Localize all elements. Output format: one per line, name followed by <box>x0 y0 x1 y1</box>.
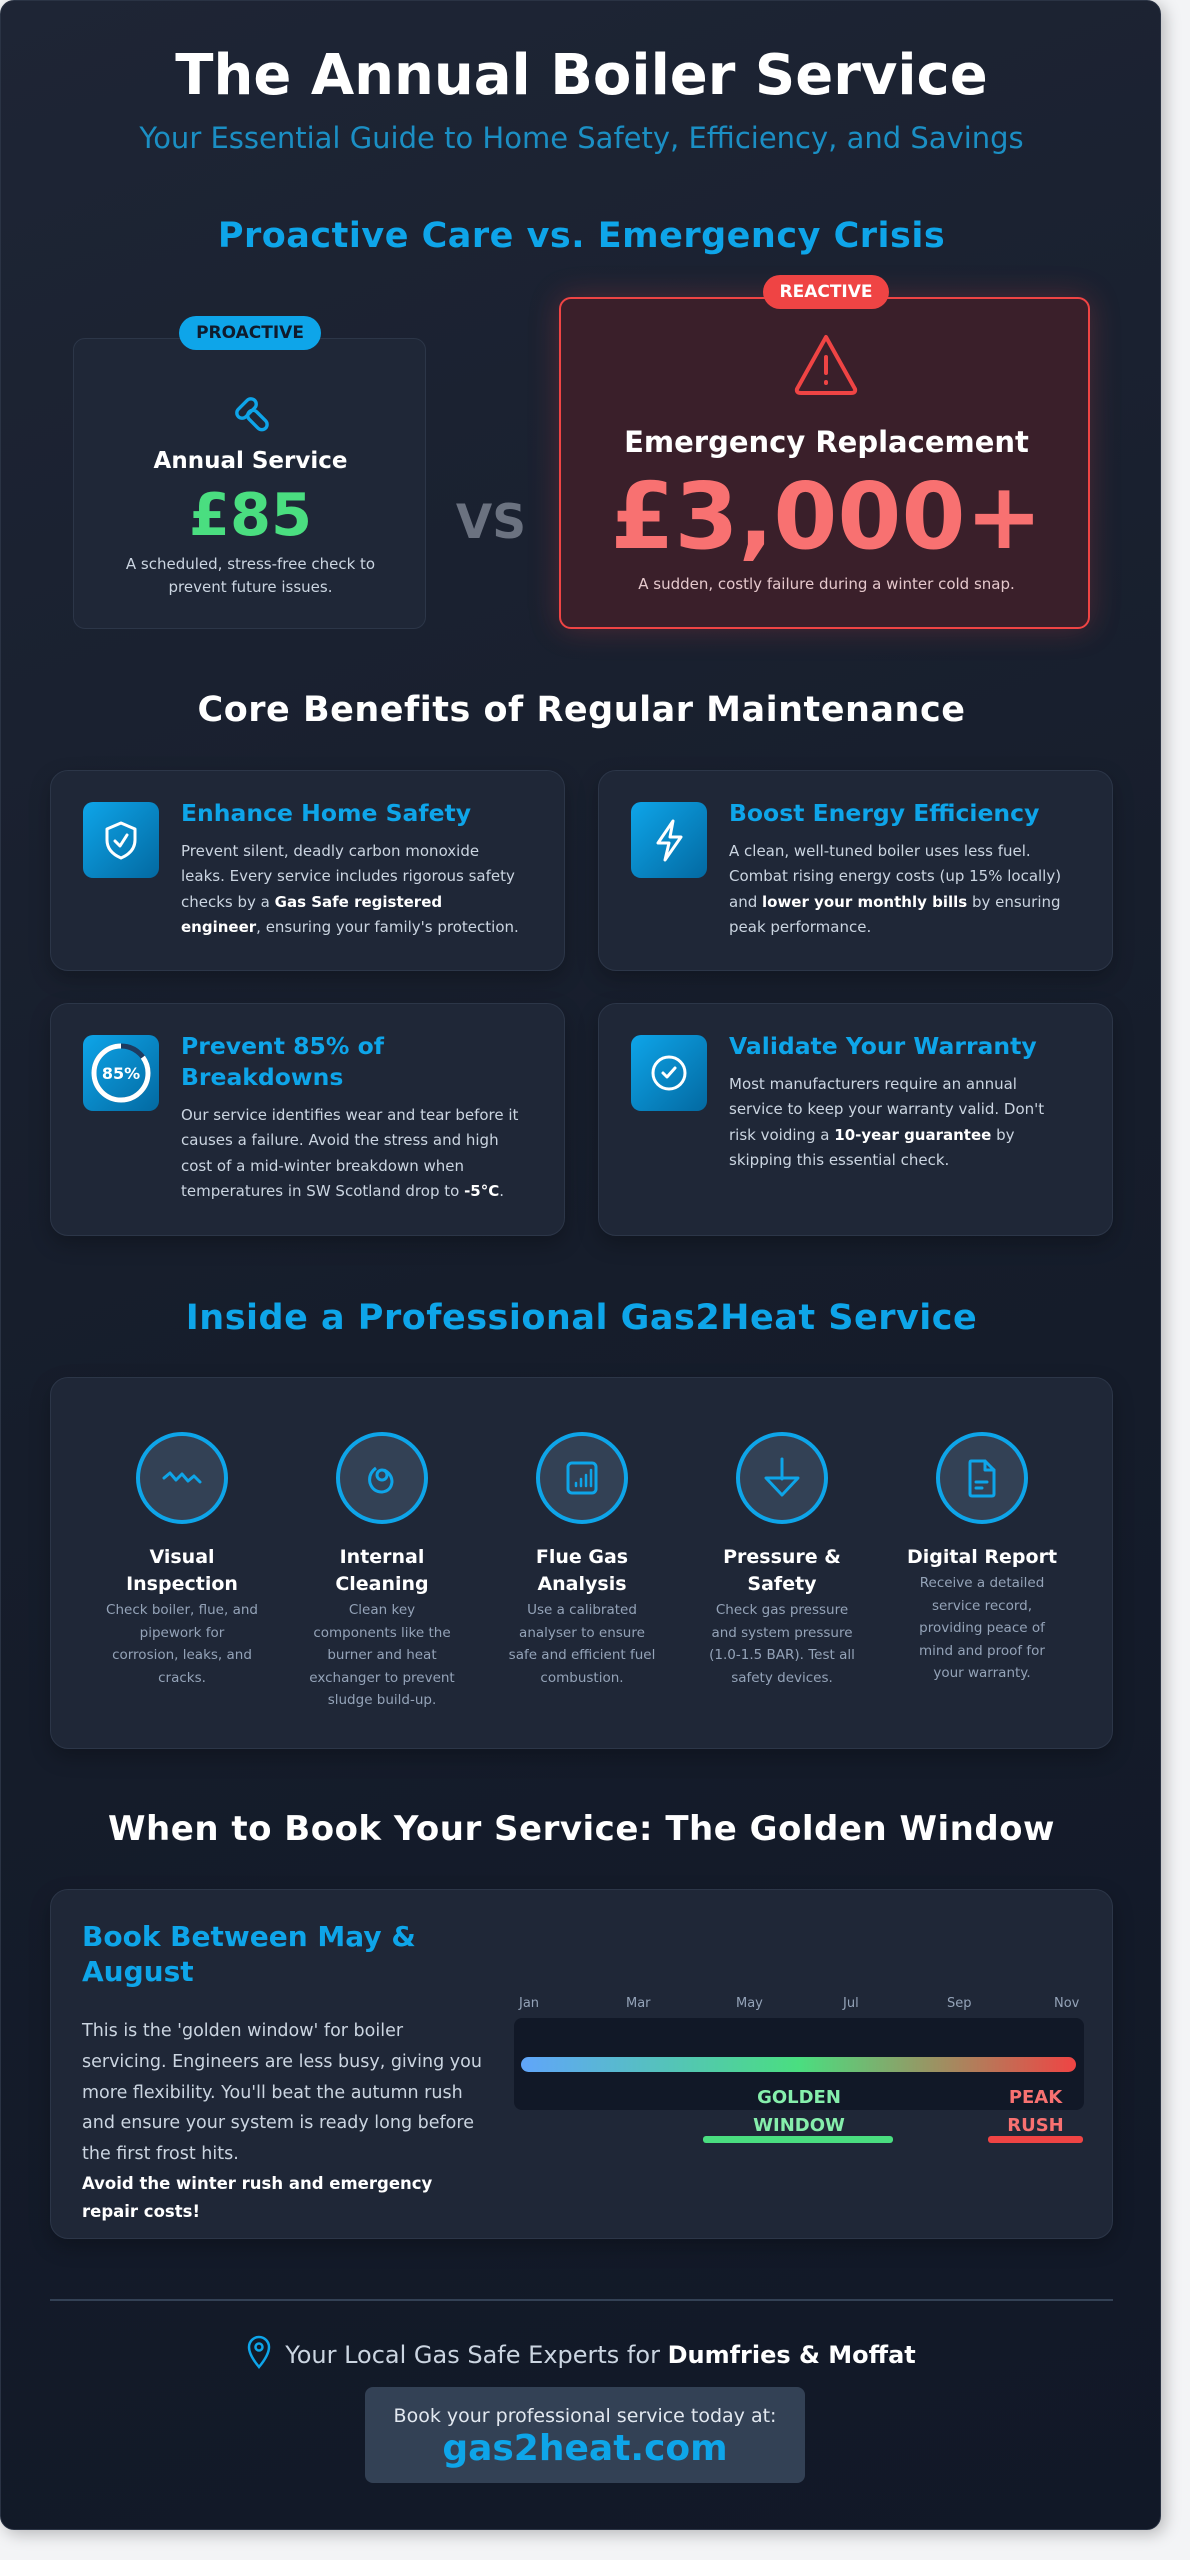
step: digital report <box>907 1432 1057 1681</box>
panel: service steps <box>50 1377 1113 1749</box>
footer: location line: Your Local Gas Safe Experts for Dumfries & Moffat <box>285 2341 916 2369</box>
panel: golden window <box>50 1889 1113 2239</box>
step: digital report: providing peace of <box>919 1620 1045 1636</box>
callout: Avoid the winter rush and emergency repair costs! <box>82 2174 432 2221</box>
month labels: Nov <box>1054 1996 1079 2011</box>
gradient bar <box>521 2057 1076 2072</box>
step: internal cleaning: sludge build-up. <box>328 1692 436 1708</box>
label: golden window: WINDOW <box>753 2115 845 2136</box>
title: Boost Energy Efficiency <box>729 799 1039 827</box>
step: internal cleaning: burner and heat <box>327 1647 437 1663</box>
step: flue gas analysis: Analysis <box>537 1573 627 1595</box>
text: A clean, well-tuned boiler uses less fuel. Combat rising energy costs (up 15% locally) and lower your monthly bills by ensuring peak performance. <box>729 842 1061 936</box>
badge: proactive: PROACTIVE <box>196 323 304 343</box>
step: pressure & safety: safety devices. <box>731 1670 833 1686</box>
panel: warranty <box>598 1003 1113 1236</box>
subtitle: Your Essential Guide to Home Safety, Efficiency, and Savings <box>139 121 1024 155</box>
step: internal cleaning <box>309 1432 455 1708</box>
label: golden window <box>753 2087 845 2136</box>
step: visual inspection <box>106 1432 258 1686</box>
label: peak rush: RUSH <box>1007 2115 1064 2136</box>
badge: reactive <box>763 275 889 309</box>
panel: proactive <box>73 338 426 629</box>
month labels: May <box>736 1996 763 2011</box>
heading: when to book: When to Book Your Service: The Golden Window <box>108 1809 1055 1849</box>
title: Enhance Home Safety <box>181 799 471 827</box>
heading: core benefits: Core Benefits of Regular Maintenance <box>198 690 965 730</box>
step: pressure & safety: (1.0-1.5 BAR). Test all <box>709 1647 855 1663</box>
text: proactive desc: A scheduled, stress-free check to prevent future issues. <box>126 555 375 596</box>
title: The Annual Boiler Service <box>175 43 988 108</box>
call to action <box>365 2387 805 2483</box>
price: £3,000+: £3,000+ <box>610 463 1043 570</box>
step: pressure & safety <box>709 1432 855 1686</box>
step: flue gas analysis: Flue Gas <box>536 1546 628 1568</box>
label: peak rush <box>1007 2087 1064 2136</box>
badge: reactive: REACTIVE <box>779 282 873 302</box>
step: visual inspection: cracks. <box>158 1670 206 1686</box>
step: visual inspection: Check boiler, flue, and <box>106 1602 258 1618</box>
step: flue gas analysis: Use a calibrated <box>527 1602 637 1618</box>
icon: check circle <box>631 1035 707 1111</box>
title: Book Between May & August <box>82 1920 416 1988</box>
month labels: Jan <box>519 1996 539 2011</box>
step: visual inspection: corrosion, leaks, and <box>112 1647 252 1663</box>
icon: warning <box>794 334 858 395</box>
heading: proactive vs reactive: Proactive Care vs. Emergency Crisis <box>218 216 945 256</box>
title: Prevent 85% of <box>181 1032 384 1060</box>
step: internal cleaning: Cleaning <box>335 1573 429 1595</box>
text: annual service: Annual Service <box>154 448 347 474</box>
step: pressure & safety: Safety <box>747 1573 817 1595</box>
month labels <box>518 1996 1079 2011</box>
step: internal cleaning: exchanger to prevent <box>309 1670 455 1686</box>
step: digital report: mind and proof for <box>919 1642 1045 1658</box>
step: internal cleaning: Internal <box>340 1546 424 1568</box>
chart: seasonal timeline <box>514 1996 1084 2143</box>
panel: efficiency <box>598 770 1113 971</box>
step: flue gas analysis: combustion. <box>540 1670 624 1686</box>
icon: 85% ring: 85% <box>102 1064 140 1083</box>
price: £85: £85 <box>189 480 312 549</box>
panel: breakdowns <box>50 1003 565 1236</box>
step: internal cleaning: components like the <box>313 1624 451 1640</box>
heading: inside service: Inside a Professional Gas2Heat Service <box>186 1298 977 1338</box>
text: emergency replacement: Emergency Replacement <box>624 425 1029 459</box>
step: pressure & safety: Check gas pressure <box>716 1602 848 1618</box>
title: Validate Your Warranty <box>729 1032 1037 1060</box>
step: flue gas analysis <box>509 1432 655 1686</box>
icon: shield <box>83 802 159 878</box>
step: visual inspection: Inspection <box>126 1573 238 1595</box>
icon: pin <box>248 2336 270 2369</box>
title: Breakdowns <box>181 1063 343 1091</box>
title <box>181 1032 384 1091</box>
step: visual inspection: Visual <box>149 1546 215 1568</box>
badge: proactive <box>179 316 321 350</box>
vs: VS <box>456 495 526 550</box>
step: pressure & safety: and system pressure <box>711 1624 853 1640</box>
step: internal cleaning: Clean key <box>349 1602 415 1618</box>
step: digital report: Receive a detailed <box>920 1575 1044 1591</box>
step: digital report: your warranty. <box>933 1665 1031 1681</box>
panel: reactive <box>559 297 1090 629</box>
text: reactive desc: A sudden, costly failure during a winter cold snap. <box>638 575 1015 593</box>
step: pressure & safety: Pressure & <box>723 1546 841 1568</box>
text: Our service identifies wear and tear before it causes a failure. Avoid the stress and high cost of a mid-winter breakdown when temperatures in SW Scotland drop to -5°C. <box>181 1106 518 1200</box>
icon: lightning <box>631 802 707 878</box>
icon: wrench <box>235 397 269 432</box>
month labels: Mar <box>626 1996 651 2011</box>
label: peak rush: PEAK <box>1009 2087 1062 2108</box>
panel: safety <box>50 770 565 971</box>
label: golden window: GOLDEN <box>757 2087 841 2108</box>
month labels: Jul <box>843 1996 859 2011</box>
month labels: Sep <box>947 1996 972 2011</box>
text: Prevent silent, deadly carbon monoxide leaks. Every service includes rigorous safety checks by a Gas Safe registered engineer, ensuring your family's protection. <box>181 842 519 936</box>
icon: 85% ring <box>83 1035 159 1111</box>
step: digital report: Digital Report <box>907 1546 1057 1568</box>
text: This is the 'golden window' for boiler servicing. Engineers are less busy, giving you more flexibility. You'll beat the autumn rush and ensure your system is ready long before the first frost hits. <box>82 2021 482 2164</box>
call to action: Book your professional service today at: <box>394 2405 776 2427</box>
step: digital report: service record, <box>932 1598 1032 1614</box>
step: visual inspection: pipework for <box>140 1624 224 1640</box>
text: Most manufacturers require an annual service to keep your warranty valid. Don't risk voiding a 10-year guarantee by skipping this essential check. <box>729 1075 1044 1169</box>
step: flue gas analysis: analyser to ensure <box>519 1624 645 1640</box>
step: flue gas analysis: safe and efficient fuel <box>509 1647 655 1663</box>
call to action: gas2heat.com <box>442 2428 728 2469</box>
